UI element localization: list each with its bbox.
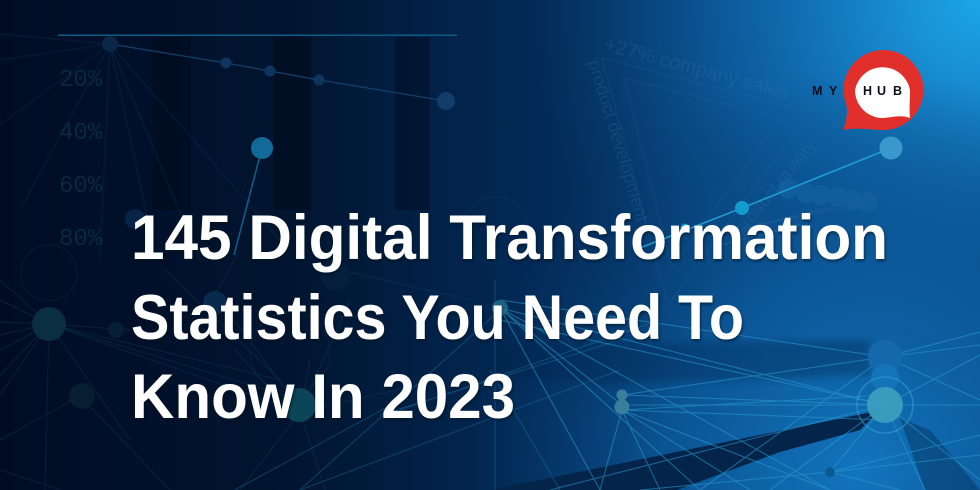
title <box>131 203 888 432</box>
chart backdrop: bars, axis and percentages <box>58 34 457 253</box>
network lines: lower left <box>0 250 470 490</box>
rising trend line with nodes <box>234 136 902 255</box>
logo: MY HUB speech bubble <box>812 50 923 130</box>
title: Statistics You Need To <box>131 283 744 353</box>
chart backdrop: bars, axis and percentages: 60% <box>59 173 103 200</box>
network nodes: lower <box>32 209 913 477</box>
network lines: lower right fan <box>500 300 980 490</box>
chart backdrop: bars, axis and percentages: 80% <box>59 226 103 253</box>
network line: top trend <box>102 36 455 110</box>
title: 145 Digital Transformation <box>131 203 888 273</box>
triangle backdrop with faint labels: +27% company sales <box>602 34 792 104</box>
network lines: upper left <box>0 34 280 260</box>
logo: MY HUB speech bubble: HUB <box>863 84 902 98</box>
triangle backdrop with faint labels: product development <box>584 57 652 224</box>
title: Know In 2023 <box>131 362 515 432</box>
chart backdrop: bars, axis and percentages: 40% <box>59 120 103 147</box>
network lines: lower middle <box>235 280 660 490</box>
triangle backdrop with faint labels <box>584 34 820 305</box>
triangle backdrop with faint labels: product quality <box>730 136 820 239</box>
faint circle outlines <box>21 197 528 392</box>
chart backdrop: bars, axis and percentages: 20% <box>59 67 103 94</box>
logo: MY HUB speech bubble: MY <box>812 84 838 98</box>
